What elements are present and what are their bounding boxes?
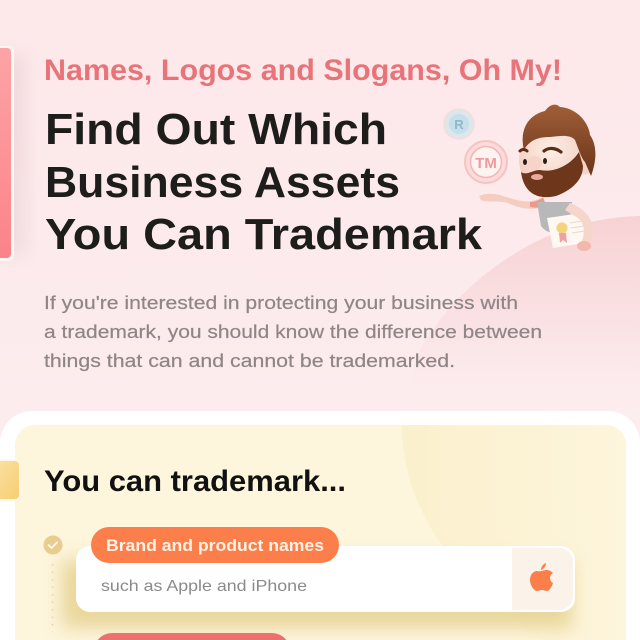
intro paragraph <box>44 292 542 371</box>
left red tab <box>0 46 26 261</box>
main title <box>45 105 483 259</box>
character head <box>519 128 583 192</box>
label pill: brand and product names <box>91 527 339 563</box>
icon: trademark symbol coin <box>465 141 507 183</box>
illustration: bearded character with trademark symbols <box>444 105 595 251</box>
panel: you can trademark <box>15 425 626 640</box>
timeline check icon <box>44 536 62 554</box>
main title: Find Out Which <box>45 105 387 154</box>
main title: Business Assets <box>45 158 400 207</box>
character nose <box>528 156 542 170</box>
icon: registered symbol coin <box>444 109 474 139</box>
character left arm <box>479 194 546 209</box>
icon: registered symbol coin: R <box>454 117 464 132</box>
decorative corner shape <box>402 425 626 546</box>
left yellow tab <box>0 459 21 501</box>
timeline dotted line <box>52 564 54 632</box>
item shadow <box>62 560 572 628</box>
background hill <box>405 216 640 420</box>
character beard <box>521 152 583 197</box>
icon: trademark symbol coin: TM <box>475 155 497 172</box>
label pill: brand and product names: Brand and product names <box>106 537 324 555</box>
apple icon tile <box>512 548 573 610</box>
item description: such as Apple and iPhone <box>101 578 307 595</box>
white card <box>0 411 640 640</box>
character hair <box>523 105 595 176</box>
list item card: brand and product names <box>76 546 575 612</box>
eyebrow heading: Names, Logos and Slogans, Oh My! <box>44 54 562 87</box>
character mouth <box>531 174 543 180</box>
next label pill (cropped) <box>94 633 290 640</box>
character eyebrows <box>544 148 561 152</box>
intro paragraph: a trademark, you should know the difference between <box>44 321 542 342</box>
character ear <box>578 160 592 174</box>
icon: apple <box>530 563 553 591</box>
main title: You Can Trademark <box>45 210 483 259</box>
section heading: You can trademark... <box>44 465 346 498</box>
certificate <box>547 213 590 248</box>
intro paragraph: things that can and cannot be trademarked. <box>44 350 455 371</box>
intro paragraph: If you're interested in protecting your business with <box>44 292 518 313</box>
character torso <box>537 202 572 233</box>
character right arm <box>565 203 593 249</box>
character eyes <box>523 158 547 165</box>
